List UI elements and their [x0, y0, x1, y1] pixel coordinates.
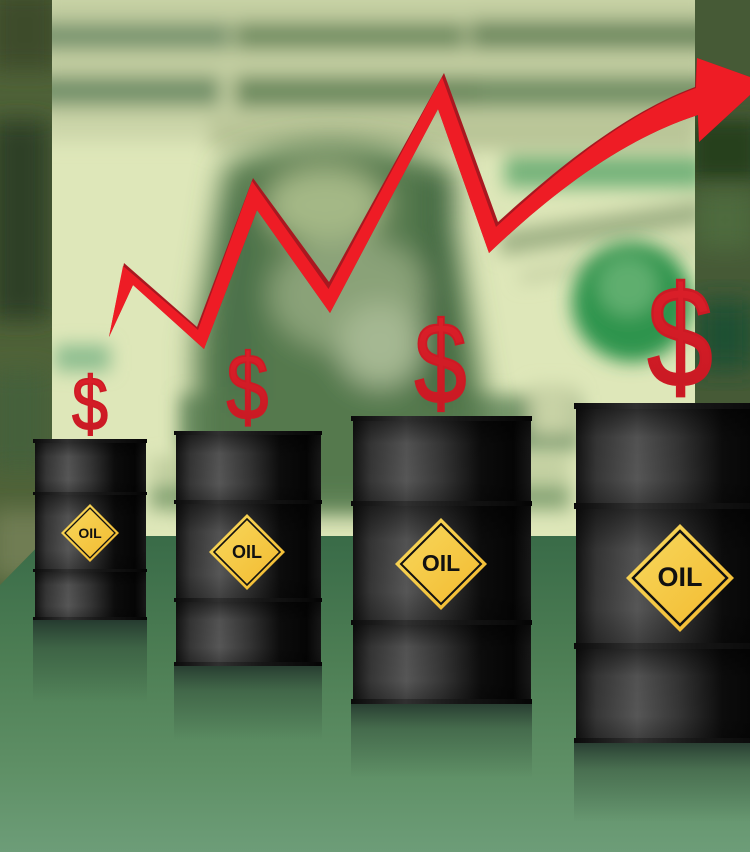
portrait: [195, 142, 485, 510]
banknote engraved bands: [30, 0, 720, 510]
background: blurred dollar bill: [30, 0, 720, 536]
barrel 1: [33, 439, 147, 620]
green seal: [572, 242, 692, 362]
dollar sign 2: $: [226, 334, 268, 439]
barrel 3 reflection: [351, 703, 532, 778]
oil label 1: [61, 504, 119, 562]
barrel 4 reflection: [574, 742, 750, 822]
arrow shadow edge: [109, 58, 750, 349]
dollar sign 4: $: [648, 258, 712, 417]
barrel 2: [174, 431, 322, 666]
background: green floor: [0, 530, 750, 852]
dollar sign 3: $: [414, 298, 466, 428]
oil label 4: [626, 524, 734, 632]
background: right blurred banknote strip: [695, 0, 750, 403]
arrow body: [109, 58, 750, 349]
barrel 1 reflection: [33, 620, 147, 702]
barrel 2 reflection: [174, 665, 322, 740]
oil label 1: OIL: [78, 525, 102, 541]
oil label 3: [395, 518, 487, 610]
oil label 3: OIL: [422, 550, 460, 576]
barrel 3: [351, 416, 532, 704]
oil label 2: OIL: [232, 542, 262, 562]
barrel 4: [574, 403, 750, 743]
rising price arrow: [109, 58, 750, 349]
oil label 2: [209, 514, 285, 590]
dollar sign 1: $: [72, 362, 108, 447]
background: left blurred banknote strip: [0, 0, 52, 585]
oil label 4: OIL: [658, 562, 702, 592]
